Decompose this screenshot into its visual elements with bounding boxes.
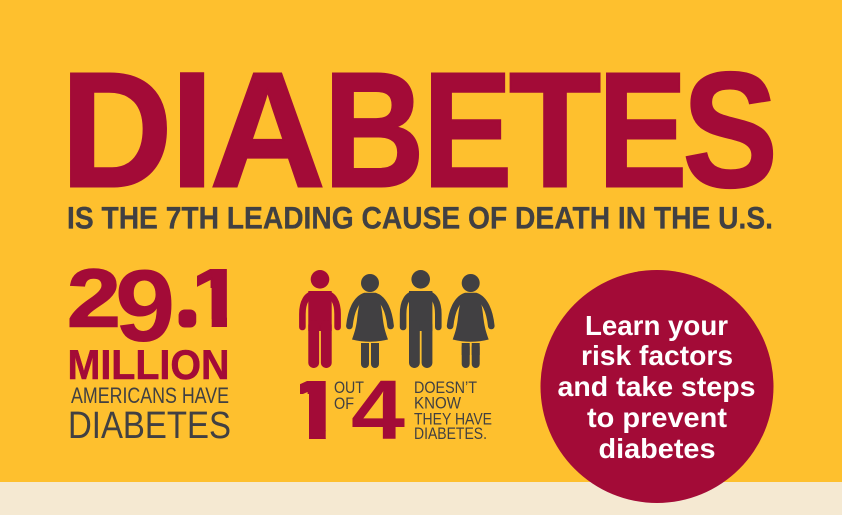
out of label: OUT: [334, 379, 364, 397]
out of label: OF: [334, 395, 354, 413]
numeral 4: 4: [351, 363, 405, 457]
callout text: and take steps: [558, 371, 756, 402]
title: A: [210, 39, 326, 222]
title: E: [598, 38, 687, 222]
icon: man, red: [302, 270, 338, 368]
numeral 1: 1: [280, 364, 348, 457]
number 29.1: 2: [67, 253, 121, 345]
MILLION: MILLION: [68, 341, 230, 388]
doesn't know text: DOESN’T: [414, 379, 477, 397]
title: S: [682, 38, 778, 222]
number 29.1: [70, 268, 227, 342]
statistic: 1 out of 4: [300, 380, 492, 439]
title: I: [169, 36, 215, 224]
subtitle: IS THE 7TH LEADING CAUSE OF DEATH IN THE U.S.: [67, 200, 773, 236]
out of label: [334, 379, 364, 413]
bottom band: [0, 482, 842, 515]
statistic: 29.1 million Americans: [70, 268, 230, 438]
icon: woman: [349, 274, 391, 368]
title: [61, 36, 778, 224]
callout circle: [540, 270, 774, 503]
doesn't know text: DIABETES.: [414, 425, 487, 443]
title: B: [324, 39, 425, 222]
doesn't know text: KNOW: [414, 394, 461, 412]
number 29.1: 1: [187, 252, 245, 346]
doesn't know text: [414, 379, 492, 443]
callout text: [558, 310, 756, 464]
callout text: risk factors: [581, 340, 733, 371]
icon: man: [403, 270, 438, 368]
callout text: diabetes: [598, 433, 716, 464]
doesn't know text: THEY HAVE: [414, 410, 492, 428]
title: T: [509, 39, 601, 222]
number 29.1: .: [182, 286, 193, 330]
callout text: Learn your: [585, 310, 728, 341]
title: E: [423, 38, 512, 222]
Americans have: AMERICANS HAVE: [71, 383, 229, 408]
title: D: [61, 37, 173, 221]
Diabetes: DIABETES: [68, 405, 231, 447]
number 29.1: 9: [115, 249, 175, 363]
icon row: four people: [302, 270, 491, 368]
icon: woman: [450, 274, 491, 368]
callout text: to prevent: [587, 402, 727, 433]
